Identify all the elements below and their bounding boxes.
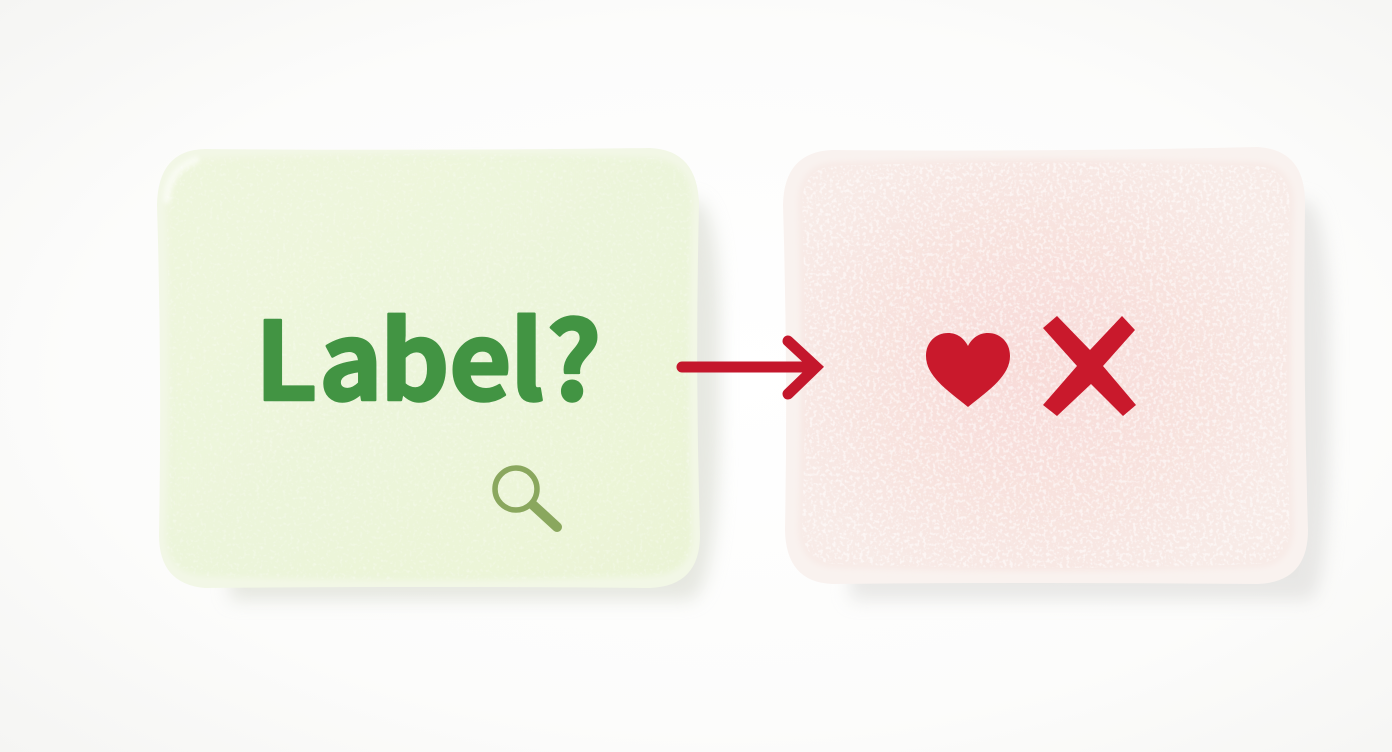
arrow — [682, 341, 816, 394]
panel: green label card — [157, 148, 720, 600]
green card shadow — [230, 200, 720, 600]
green card body — [157, 148, 700, 588]
infographic scene — [157, 147, 1332, 604]
icon: X mark — [1043, 316, 1136, 416]
red card shadow — [850, 200, 1330, 600]
panel: red result card — [783, 147, 1330, 600]
icon: magnifying glass — [495, 468, 557, 527]
corner highlight — [167, 160, 196, 200]
green card inner surface — [166, 154, 692, 580]
red card texture — [802, 162, 1290, 568]
heading: Label?: Label? — [255, 276, 602, 432]
red card inner surface — [798, 159, 1294, 571]
icon: heart — [926, 333, 1010, 407]
red card body — [783, 147, 1308, 584]
green card texture — [160, 150, 695, 585]
